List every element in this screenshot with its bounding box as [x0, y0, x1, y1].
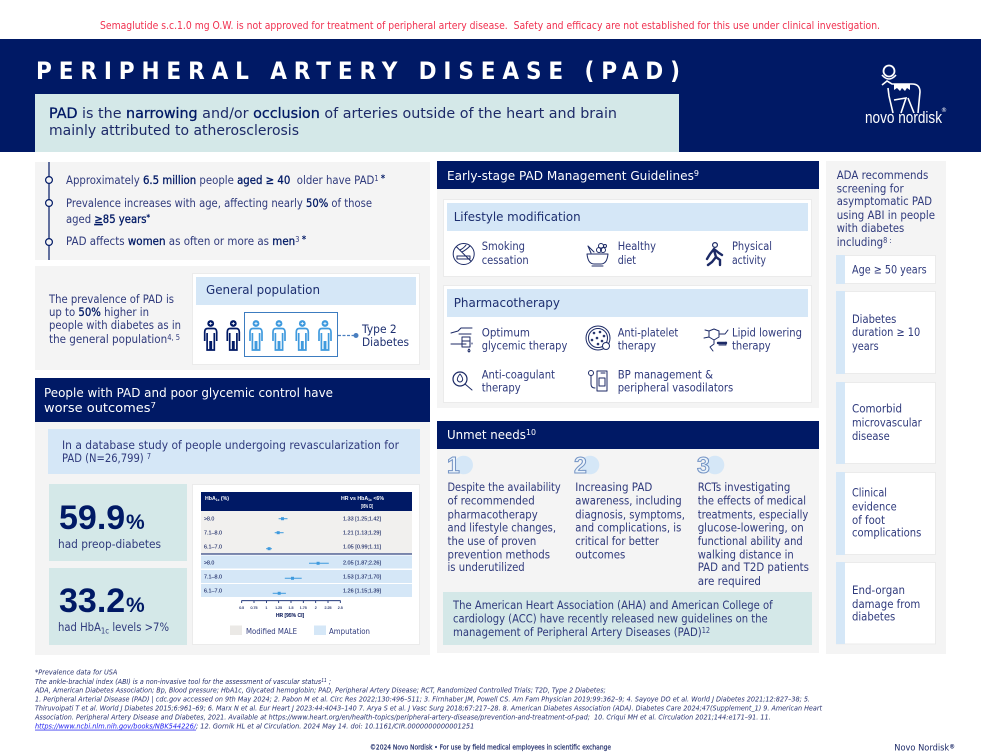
- x axis: HR [95% CI]: [276, 613, 305, 619]
- need 1: 1: [447, 452, 460, 478]
- criterion: microvascular: disease: [852, 429, 890, 443]
- need 3: PAD and T2D patients: [698, 560, 809, 574]
- smoking cessation text: [482, 239, 529, 267]
- screening text: 8 :: [883, 236, 892, 245]
- criterion: foot complications: complications: [852, 526, 921, 540]
- panel: prevalence facts: Approximately 6.5 million people aged ≥ 40 older have PAD: [66, 173, 386, 187]
- connector: [338, 333, 358, 338]
- type 2 diabetes label: Type 2: [361, 322, 397, 336]
- criterion: end-organ damage: [836, 562, 936, 644]
- panel: prevalence facts: 1: [374, 174, 379, 183]
- need 3: are required: [698, 574, 761, 588]
- icon: lipid lowering: [704, 329, 728, 351]
- icon: glycemic therapy: [451, 328, 472, 352]
- legend: [230, 626, 370, 636]
- need 2: diagnosis, symptoms,: [575, 507, 685, 521]
- icon: anti-coagulant: [453, 372, 472, 390]
- need 2: [574, 452, 685, 561]
- criterion: duration: duration ≥ 10: [852, 325, 920, 339]
- brand name: Novo Nordisk: [894, 744, 951, 754]
- need 3: 3: [697, 452, 710, 478]
- study description: [48, 429, 420, 474]
- modified MALE rows: 1.33 [1.25;1.42]: [343, 517, 381, 523]
- footnotes: [34, 668, 823, 731]
- need 2: 2: [574, 452, 587, 478]
- legend: Amputation: [329, 627, 370, 636]
- need 2: outcomes: [575, 547, 625, 561]
- healthy diet text: Healthy: [618, 239, 656, 253]
- hazard ratio markers: [266, 517, 329, 595]
- criterion: foot complications: Clinical: [852, 486, 887, 500]
- footnotes: *Prevalence data for USA: [35, 668, 117, 677]
- screening text: including: [837, 235, 890, 249]
- physical activity text: Physical: [732, 239, 772, 253]
- panel: prevalence facts: 3: [295, 235, 300, 244]
- amputation rows: 6.1–7.0: [204, 589, 222, 595]
- criterion: duration: years: [852, 339, 879, 353]
- x axis: 1.25: [275, 606, 282, 610]
- modified MALE rows: 7.1–8.0: [204, 531, 222, 537]
- heading: 7: [150, 401, 156, 410]
- panel: prevalence facts: PAD affects women as often or more as men: [66, 234, 298, 248]
- need 1: of recommended: [448, 493, 535, 507]
- need 2: awareness, including: [575, 493, 682, 507]
- icon: smoking cessation: [453, 244, 474, 264]
- modified MALE rows: >8.0: [204, 517, 214, 523]
- need 3: functional ability and: [698, 534, 803, 548]
- modified MALE rows: [201, 511, 412, 554]
- glycemic therapy text: [482, 325, 567, 352]
- prevalence text: 4, 5: [167, 333, 180, 342]
- panel: diabetes prevalence: [35, 266, 430, 370]
- callout: new guidelines: cardiology (ACC) have recently released new guidelines on the: [453, 612, 768, 626]
- need 1: Despite the availability: [448, 480, 561, 494]
- callout: new guidelines: [443, 592, 812, 645]
- card: lifestyle modification: Lifestyle modification: [454, 209, 581, 224]
- logo: novo nordisk: novo nordisk: [865, 108, 942, 127]
- icon: healthy diet: [587, 244, 608, 266]
- general population card: [192, 274, 420, 364]
- panel: prevalence facts: *: [379, 174, 385, 184]
- anti-platelet text: therapy: [618, 338, 656, 352]
- x axis: 2.5: [338, 606, 343, 610]
- panel: prevalence facts: *: [147, 213, 150, 222]
- criterion: foot complications: evidence: [852, 500, 897, 514]
- type 2 diabetes label: Diabetes: [362, 335, 409, 349]
- callout: new guidelines: The American Heart Association (AHA) and American College of: [452, 598, 773, 612]
- criterion: duration: Diabetes: [852, 312, 896, 326]
- forest plot header: HbA: [205, 496, 216, 502]
- need 1: prevention methods: [448, 547, 550, 561]
- forest plot: [192, 484, 420, 644]
- x axis: 1.5: [288, 606, 294, 610]
- need 3: RCTs investigating: [698, 480, 790, 494]
- card: lifestyle modification: [444, 200, 812, 276]
- criterion: duration: [836, 291, 936, 374]
- criterion: microvascular: Comorbid: [852, 402, 902, 416]
- copyright: ©2024 Novo Nordisk • For use by field medical employees in scientific exchange: [370, 743, 611, 751]
- stat: 33.2%: had HbA: [58, 620, 108, 634]
- footnotes: Thiruvoipati T et al. World J Diabetes 2015;6:961–69; 6. Marx N et al. Eur Heart J 2023:44:4043–140 7. Arya S et al. J Vasc Surg 2018;67:217–28. 8. American Diabetes Association (ADA). Diabetes Care 2024;47(Supplement_1) 9. American Heart: [35, 704, 823, 713]
- need 1: and lifestyle changes,: [448, 521, 556, 535]
- forest plot header: [95% CI]: [361, 504, 373, 510]
- screening text: asymptomatic PAD: [837, 194, 932, 208]
- x axis: 2: [315, 606, 317, 610]
- callout: new guidelines: management of Peripheral Artery Diseases (PAD): [453, 625, 739, 639]
- icon: blood pressure: [588, 370, 607, 391]
- prevalence text: The prevalence of PAD is: [48, 292, 174, 306]
- forest plot header: 1c: [368, 498, 372, 502]
- criterion: microvascular: microvascular: [852, 416, 922, 430]
- x axis: 1: [265, 606, 267, 610]
- criterion: age: [836, 255, 936, 284]
- stat: 33.2%: levels >7%: [109, 620, 169, 634]
- heading: Early-stage PAD Management Guidelines: [447, 169, 692, 183]
- x axis: 1.75: [300, 606, 307, 610]
- glycemic therapy text: Optimum: [482, 325, 530, 339]
- amputation rows: [201, 556, 412, 597]
- heading: 10: [526, 428, 536, 437]
- need 3: glucose-lowering, on: [698, 521, 804, 535]
- definition box: mainly attributed to atherosclerosis: [49, 123, 299, 139]
- disclaimer: Semaglutide s.c.1.0 mg O.W. is not approved for treatment of peripheral artery disease. Safety and efficacy are not established for this use under clinical investigation.: [100, 20, 880, 32]
- stat: 33.2%: 33.2: [59, 582, 125, 620]
- forest plot header: 1c: [216, 498, 219, 502]
- BP management text: peripheral vasodilators: [618, 380, 733, 394]
- study description: PAD (N=26,799): [62, 451, 157, 465]
- panel: prevalence facts: Prevalence increases with age, affecting nearly 50% of those: [66, 196, 372, 210]
- type 2 diabetes label: [361, 322, 409, 349]
- lipid lowering text: Lipid lowering: [732, 325, 802, 339]
- stat: 33.2%: %: [126, 594, 145, 617]
- need 1: [447, 452, 561, 574]
- physical activity text: [732, 239, 772, 267]
- callout: new guidelines: 12: [702, 626, 710, 635]
- panel: poor glycemic control: [35, 378, 430, 655]
- need 3: treatments, especially: [698, 507, 808, 521]
- anti-coagulant text: therapy: [482, 380, 521, 394]
- criterion: foot complications: [836, 472, 936, 555]
- panel: management guidelines: [437, 161, 819, 408]
- amputation rows: >8.0: [204, 561, 214, 567]
- need 1: the use of proven: [448, 534, 536, 548]
- panel: unmet needs: [437, 421, 819, 653]
- study description: In a database study of people undergoing revascularization for: [62, 438, 399, 452]
- heading: 9: [694, 169, 699, 178]
- criterion: microvascular: [836, 382, 936, 464]
- anti-coagulant text: [482, 367, 555, 394]
- legend: Modified MALE: [246, 627, 297, 636]
- criterion: end-organ damage: damage from: [852, 597, 920, 611]
- logo: novo nordisk: [865, 66, 947, 127]
- BP management text: [618, 367, 733, 394]
- healthy diet text: diet: [618, 253, 636, 267]
- header band: [0, 39, 981, 152]
- need 3: walking distance in: [698, 547, 794, 561]
- stat: 59.9%: 59.9: [59, 499, 125, 537]
- prevalence text: [48, 292, 181, 346]
- footnotes: https://www.ncbi.nlm.nih.gov/books/NBK544226/; 12. Gornik HL et al Circulation. 2024 May 14. doi: 10.1161/CIR.0000000000001251: [35, 722, 474, 731]
- smoking cessation text: cessation: [482, 253, 529, 267]
- footnotes: 1. Peripheral Arterial Disease (PAD) | cdc.gov accessed on 9th May 2024; 2. Pabon M et al. Circ Res 2022;130:496–511; 3. Firnhaber JM, Powell CS. Am Fam Physician 2019;99:362–9; 4. Sayoye DO et al. World J Diabetes 2021;12:827–38; 5.: [35, 695, 810, 704]
- need 3: [697, 452, 809, 588]
- modified MALE rows: 1.05 [0.99;1.11]: [343, 545, 381, 551]
- modified MALE rows: 6.1–7.0: [204, 545, 222, 551]
- screening text: ADA recommends: [837, 168, 928, 182]
- criterion: end-organ damage: End-organ: [852, 583, 905, 597]
- definition box: [35, 94, 679, 152]
- heading: People with PAD and poor glycemic control have: [44, 386, 333, 400]
- x axis: 0.75: [250, 606, 258, 610]
- physical activity text: activity: [732, 253, 766, 267]
- heading: [437, 421, 819, 449]
- panel: prevalence facts: *: [299, 235, 306, 245]
- lipid lowering text: [732, 325, 802, 352]
- icon: people: [205, 312, 338, 356]
- screening text: using ABI in people: [837, 208, 935, 222]
- glycemic therapy text: glycemic therapy: [482, 338, 567, 352]
- x axis: 2.25: [324, 606, 332, 610]
- stat: 59.9%: [49, 484, 187, 561]
- logo: novo nordisk: ®: [941, 107, 947, 114]
- criterion: foot complications: of foot: [852, 513, 885, 527]
- panel: prevalence facts: [35, 162, 430, 260]
- footnotes: Association. Peripheral Artery Disease and Diabetes, 2021. Available at https://www.heart.org/en/health-topics/peripheral-artery-disease/prevention-and-treatment-of-pad; 10. Criqui MH et al. Circulation 2021;144:e171–91. 11.: [34, 713, 771, 722]
- forest plot header: HR vs HbA: [341, 496, 370, 502]
- BP management text: BP management &: [618, 367, 713, 381]
- anti-coagulant text: Anti-coagulant: [482, 367, 555, 381]
- smoking cessation text: Smoking: [482, 239, 525, 253]
- panel: prevalence facts: aged ≥85 years: [66, 212, 153, 226]
- prevalence text: up to 50% higher in: [49, 305, 149, 319]
- prevalence text: the general population: [49, 332, 181, 346]
- need 2: critical for better: [575, 534, 659, 548]
- screening text: with diabetes: [837, 221, 904, 235]
- footnotes: The ankle-brachial index (ABI) is a non-invasive tool for the assessment of vascular status: [35, 677, 359, 686]
- criterion: end-organ damage: diabetes: [852, 610, 895, 624]
- heading: worse outcomes: [44, 401, 142, 415]
- lipid lowering text: therapy: [732, 338, 771, 352]
- forest plot header: [201, 492, 412, 511]
- modified MALE rows: 1.21 [1.13;1.29]: [343, 531, 381, 537]
- anti-platelet text: [618, 325, 679, 352]
- icon: anti-platelet: [586, 326, 610, 350]
- title: PERIPHERAL ARTERY DISEASE (PAD): [36, 57, 680, 85]
- prevalence text: people with diabetes as in: [49, 318, 181, 332]
- x axis: [239, 601, 343, 619]
- need 1: is underutilized: [448, 560, 525, 574]
- stat: 33.2%: 1c: [101, 626, 109, 636]
- need 2: Increasing PAD: [575, 480, 652, 494]
- criterion: age: Age ≥ 50 years: [852, 262, 927, 276]
- heading: Unmet needs: [447, 428, 527, 442]
- stat: 59.9%: had preop-diabetes: [58, 537, 161, 551]
- study description: 7: [147, 452, 151, 461]
- icon: physical activity: [707, 243, 722, 265]
- brand name: ®: [949, 744, 955, 751]
- amputation rows: 2.05 [1.87;2.26]: [343, 561, 381, 567]
- forest plot header: (%): [219, 496, 229, 502]
- amputation rows: 7.1–8.0: [204, 575, 222, 581]
- footnotes: 11: [321, 678, 327, 684]
- stat: 33.2%: [49, 568, 187, 645]
- amputation rows: 1.53 [1.37;1.70]: [343, 575, 381, 581]
- card: pharmacotherapy: [444, 286, 812, 402]
- general population card: General population: [206, 282, 320, 297]
- screening text: [837, 168, 935, 249]
- need 3: the effects of medical: [698, 493, 806, 507]
- anti-platelet text: Anti-platelet: [618, 325, 679, 339]
- need 1: pharmacotherapy: [448, 507, 538, 521]
- heading: [35, 378, 430, 422]
- card: pharmacotherapy: Pharmacotherapy: [454, 295, 561, 310]
- x axis: 0.5: [239, 606, 244, 610]
- footnotes: ;: [327, 677, 331, 686]
- stat: 59.9%: %: [126, 511, 145, 534]
- heading: [437, 161, 819, 189]
- panel: ADA screening: [826, 161, 946, 654]
- forest plot header: <6%: [372, 496, 384, 502]
- definition box: PAD is the narrowing and/or occlusion of arteries outside of the heart and brain: [49, 106, 617, 122]
- footnotes: ADA, American Diabetes Association; Bp, Blood pressure; HbA1c, Glycated hemoglobin; PAD, Peripheral Artery Disease; RCT, Randomized Controlled Trials; T2D, Type 2 Diabetes;: [34, 686, 606, 695]
- amputation rows: 1.26 [1.15;1.39]: [343, 589, 381, 595]
- screening text: screening for: [837, 181, 904, 195]
- need 2: and complications, is: [575, 521, 681, 535]
- healthy diet text: [618, 239, 656, 267]
